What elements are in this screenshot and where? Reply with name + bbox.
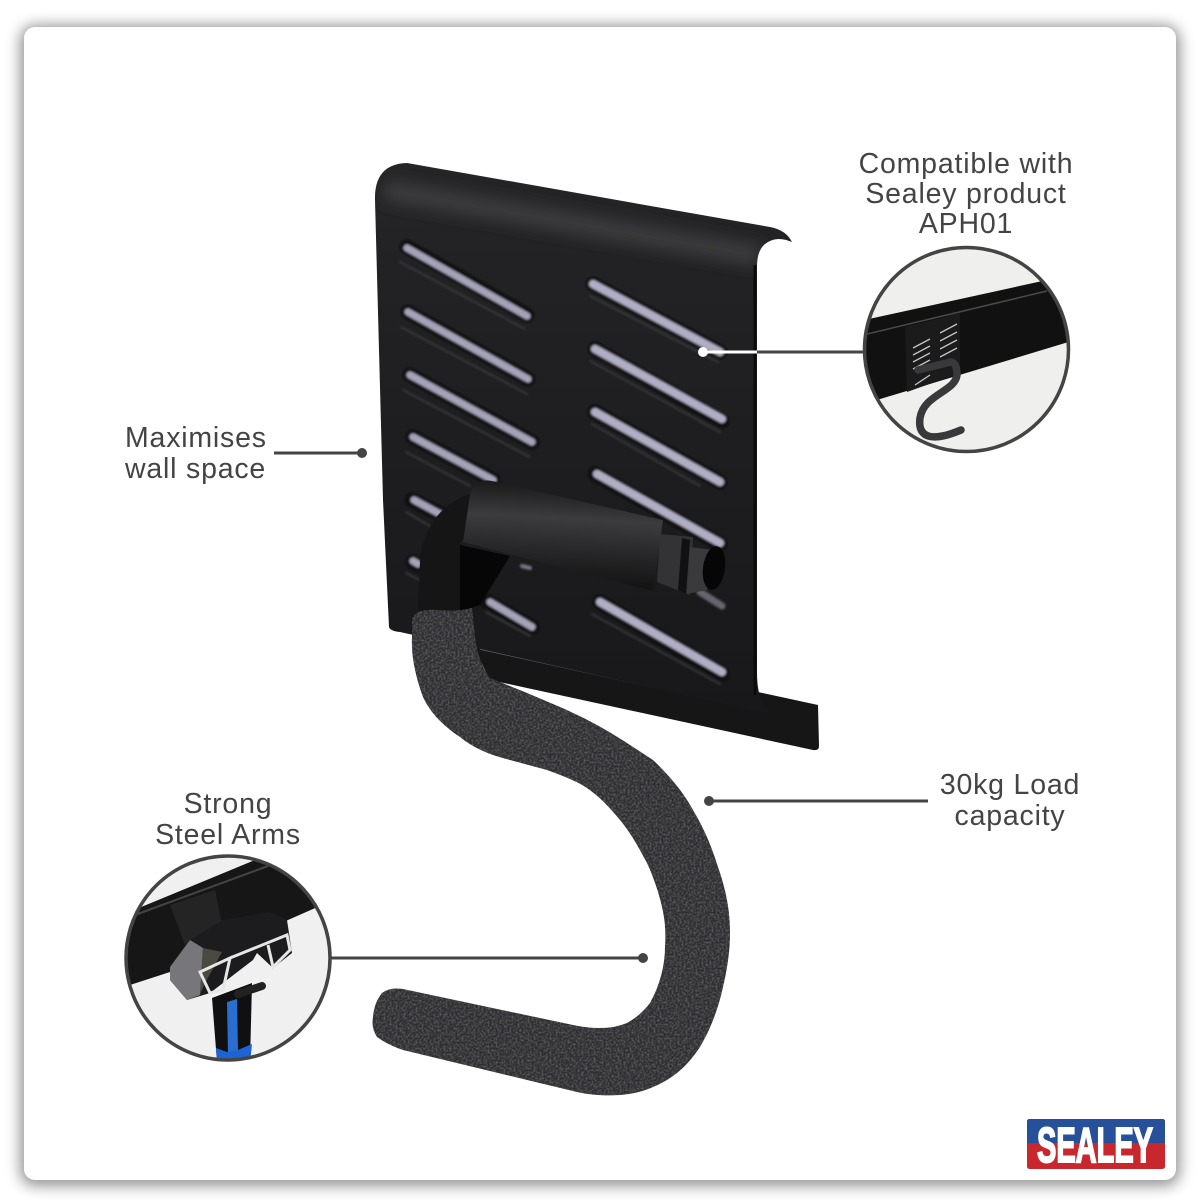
peg end bolt [657, 534, 728, 595]
connector: compatible [698, 347, 864, 357]
callout: compatible text: Sealey product [865, 178, 1067, 210]
callout: maximises text: Maximises [125, 422, 267, 454]
callout: load capacity text [940, 769, 1080, 832]
inset: hammer on hook [122, 854, 332, 1064]
steel arm bend [418, 492, 476, 614]
connector: steel arms [330, 953, 648, 963]
connector: load capacity [704, 796, 928, 806]
plate right column slots [590, 284, 722, 684]
back plate [370, 160, 800, 720]
hammer handle [212, 983, 252, 1062]
callout: maximises text [124, 422, 267, 485]
callout: compatible text: Compatible with [859, 148, 1073, 180]
callout: maximises text: wall space [124, 453, 266, 485]
inset: rail with hook [860, 245, 1075, 457]
infographic canvas [124, 152, 1165, 1169]
hammer head [170, 912, 292, 1000]
callout: compatible text [859, 148, 1073, 240]
peg cylinder [463, 481, 663, 591]
connector: maximises [274, 448, 367, 458]
product: wall hook [370, 160, 819, 1095]
plate left column slots [400, 247, 532, 636]
foam covered hook [372, 608, 730, 1095]
shadow under peg [460, 545, 510, 612]
lower lip of plate [470, 640, 819, 750]
callout: load capacity text: 30kg Load [940, 769, 1080, 801]
callout: steel arms text: Steel Arms [155, 819, 301, 851]
callout: steel arms text: Strong [184, 788, 272, 820]
callout: compatible text: APH01 [919, 208, 1013, 240]
callout: steel arms text [155, 788, 301, 851]
callout: load capacity text: capacity [955, 800, 1065, 832]
